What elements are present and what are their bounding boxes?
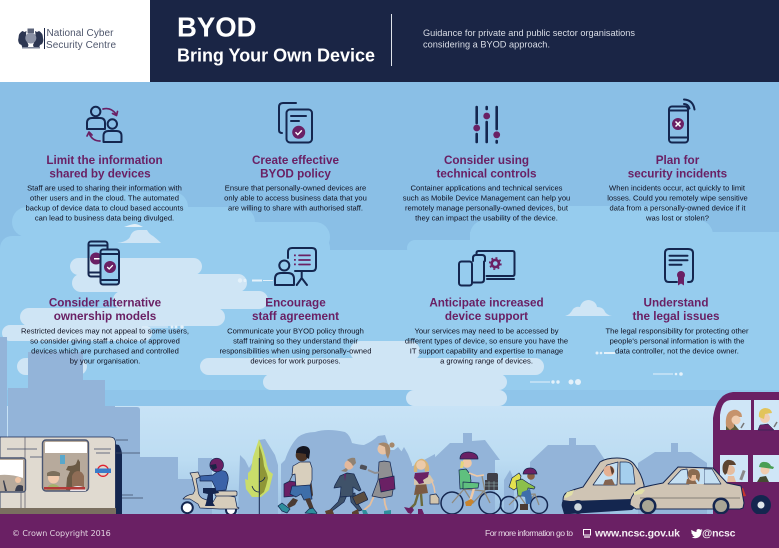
icon: monitor bbox=[584, 530, 590, 537]
heading: shared by devices bbox=[49, 168, 151, 180]
heading: Understand bbox=[644, 296, 708, 310]
body text: different types of device, so ensure you have the bbox=[405, 336, 568, 346]
body text: data controller, not the device owner. bbox=[615, 346, 739, 356]
header: logo panel: Security Centre bbox=[46, 40, 116, 51]
guidance text: considering a BYOD approach. bbox=[423, 40, 550, 50]
website: www.ncsc.gov.uk bbox=[594, 528, 680, 540]
header: navy title panel bbox=[150, 0, 779, 82]
body text: losses. Could you remotely wipe sensitive bbox=[607, 194, 748, 202]
heading: Create effective bbox=[252, 154, 340, 167]
panel: create effective BYOD policy bbox=[224, 103, 367, 212]
body text: a growing range of devices. bbox=[440, 356, 533, 366]
heading: the legal issues bbox=[632, 310, 720, 323]
clouds bbox=[2, 224, 612, 406]
body text: IT support capability and expertise to manage bbox=[410, 346, 563, 356]
icon: royal crest bbox=[18, 28, 43, 48]
illustration: woman with scarf bbox=[404, 459, 439, 514]
illustration: underground train bbox=[0, 437, 143, 514]
illustration: scooter rider bbox=[182, 458, 239, 515]
dotted trails bbox=[142, 278, 683, 424]
illustration: car right bbox=[630, 467, 744, 514]
heading: security incidents bbox=[628, 168, 728, 180]
heading: Plan for bbox=[656, 154, 700, 167]
sky background bbox=[0, 82, 779, 514]
icon: phone wipe bbox=[669, 100, 694, 142]
panel: security incidents bbox=[607, 100, 748, 222]
body text: other users and in the cloud. The automated bbox=[30, 194, 179, 202]
footer band bbox=[0, 514, 779, 548]
heading: BYOD policy bbox=[260, 168, 331, 180]
body text: When incidents occur, act quickly to limit bbox=[609, 184, 746, 192]
title: BYOD bbox=[177, 12, 256, 42]
header: logo panel bbox=[0, 0, 150, 82]
train window bbox=[42, 440, 88, 491]
panel: limit the information bbox=[26, 107, 184, 222]
ground haze bbox=[0, 406, 779, 514]
body text: Container applications and technical services bbox=[411, 184, 563, 192]
heading: Anticipate increased bbox=[429, 296, 544, 310]
body text: Communicate your BYOD policy through bbox=[227, 326, 364, 336]
heading: technical controls bbox=[436, 168, 537, 180]
body text: devices for work purposes. bbox=[250, 356, 341, 366]
illustration: businessman bbox=[325, 458, 368, 514]
icon: certificate bbox=[665, 249, 693, 286]
body text: The legal responsibility for protecting other bbox=[605, 326, 749, 336]
bus tail light bbox=[739, 488, 746, 497]
body text: staff training so they understand their bbox=[233, 336, 358, 346]
bus upper left window bbox=[720, 400, 751, 430]
panel: device support bbox=[405, 251, 568, 366]
illustration: tree bbox=[245, 439, 273, 514]
body text: Ensure that personally-owned devices are bbox=[225, 184, 366, 192]
body text: data from a personally-owned device if it bbox=[610, 204, 746, 212]
icon: devices with gear bbox=[459, 251, 514, 286]
body text: remotely manage personally-owned devices, but bbox=[405, 204, 569, 212]
icon: twitter bird bbox=[691, 529, 703, 538]
train side window bbox=[0, 458, 26, 492]
heading: ownership models bbox=[54, 310, 157, 323]
body text: such as Mobile Device Management can help you bbox=[403, 194, 570, 202]
illustration: car left bbox=[562, 458, 644, 514]
panel: staff agreement bbox=[220, 248, 371, 366]
body text: Staff are used to sharing their information with bbox=[27, 184, 182, 192]
icon: policy document bbox=[279, 103, 312, 142]
icon: two phones bbox=[88, 242, 119, 284]
panel: alternative ownership bbox=[21, 242, 189, 366]
body text: devices which are purchased and controlled bbox=[31, 346, 179, 356]
body text: was lost or stolen? bbox=[645, 214, 709, 222]
body text: people's personal information is with the bbox=[610, 336, 744, 346]
heading: Consider using bbox=[444, 154, 529, 167]
logo text: National Cyber bbox=[46, 28, 114, 39]
body text: they can impact the usability of the device. bbox=[415, 214, 558, 222]
copyright: © Crown Copyright 2016 bbox=[12, 529, 111, 538]
body text: backup of device data to cloud based accounts bbox=[26, 204, 184, 212]
body text: responsibilities when using personally-owned bbox=[220, 346, 371, 356]
body text: only able to access business data that you bbox=[224, 194, 367, 202]
icon: presenter with board bbox=[275, 248, 316, 285]
icon: roundel bbox=[95, 465, 111, 476]
body text: are willing to share with authorised staff. bbox=[228, 204, 363, 212]
illustration: cyclist adult bbox=[441, 452, 501, 514]
more information: For more information go to bbox=[485, 528, 573, 538]
icon: sliders bbox=[473, 107, 500, 142]
illustration: man with bag bbox=[278, 446, 317, 514]
guidance text: Guidance for private and public sector organisations bbox=[423, 28, 635, 38]
subtitle: Bring Your Own Device bbox=[177, 46, 375, 66]
bus upper right window bbox=[754, 400, 779, 430]
guidance text bbox=[423, 28, 635, 50]
heading: Encourage bbox=[265, 296, 326, 310]
panel: legal issues bbox=[605, 249, 749, 356]
illustration: cyclist child bbox=[500, 468, 548, 514]
body text: Your services may need to be accessed by bbox=[414, 326, 559, 336]
bus lower left window bbox=[720, 455, 748, 482]
heading: Consider alternative bbox=[49, 296, 162, 310]
illustration: woman with phone bbox=[359, 442, 395, 514]
body text: by your organisation. bbox=[70, 356, 140, 366]
body text: can lead to business data being divulged. bbox=[35, 214, 174, 222]
heading: device support bbox=[445, 310, 528, 323]
heading: Limit the information bbox=[46, 154, 163, 167]
body text: Restricted devices may not appeal to some users, bbox=[21, 326, 189, 336]
panel: technical controls bbox=[403, 107, 570, 222]
icon: people sharing bbox=[87, 107, 122, 142]
heading: staff agreement bbox=[252, 310, 339, 323]
illustration: double decker bus bbox=[713, 392, 779, 515]
twitter handle: @ncsc bbox=[702, 528, 736, 540]
city skyline silhouette bbox=[0, 337, 707, 514]
body text: so consider giving staff a choice of approved bbox=[30, 336, 180, 346]
bus lower right window bbox=[753, 455, 779, 482]
